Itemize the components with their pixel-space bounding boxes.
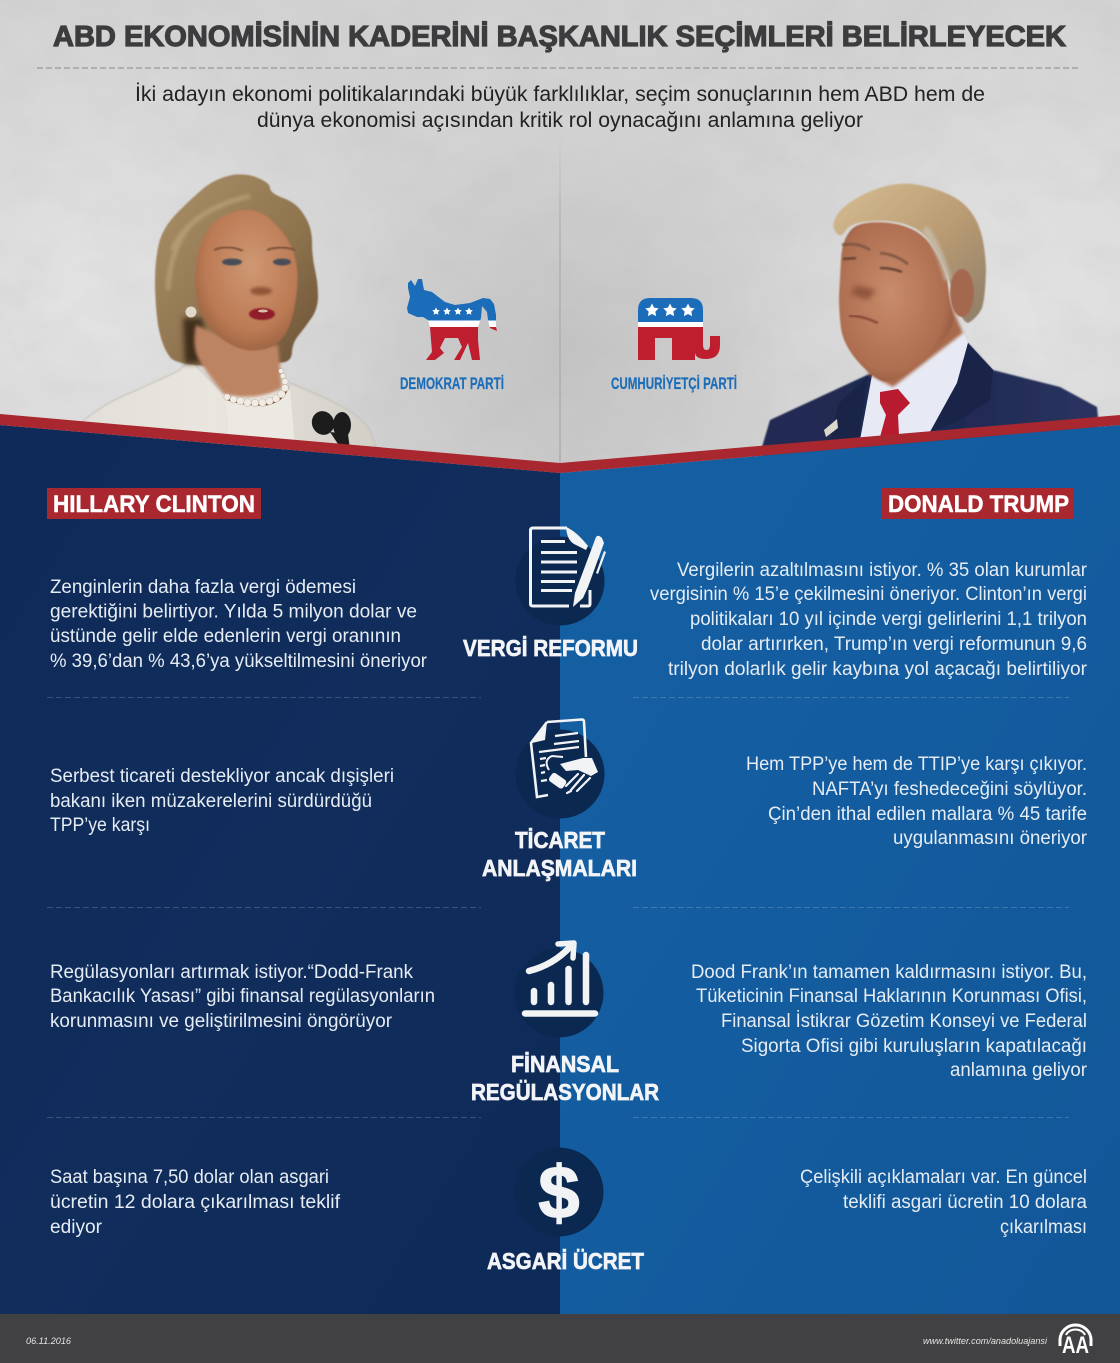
label: Vergi Reformu: VERGİ REFORMU	[463, 635, 638, 661]
text: Trump tax reform: politikaları 10 yıl içinde vergi gelirlerini 1,1 trilyon	[690, 609, 1087, 630]
text: Clinton tax reform	[50, 577, 428, 672]
red chevron band	[0, 414, 1120, 473]
text: Trump minimum wage: Çelişkili açıklamaları var. En güncel	[800, 1167, 1087, 1188]
text: Clinton financial regulation	[50, 962, 435, 1032]
text: Clinton trade agreements	[50, 766, 394, 836]
icon: trade agreement handshake	[516, 720, 604, 818]
footer url: www.twitter.com/anadoluajansi	[923, 1336, 1048, 1346]
icon: minimum wage dollar	[514, 1148, 604, 1236]
text: Trump minimum wage	[800, 1167, 1087, 1238]
text: Trump trade agreements: Çin’den ithal edilen mallara % 45 tarife	[768, 804, 1087, 825]
text: Trump trade agreements: uygulanmasını öneriyor	[893, 828, 1088, 849]
label: Finansal Regülasyonlar: FİNANSAL	[511, 1051, 619, 1077]
label: Finansal Regülasyonlar	[471, 1051, 659, 1105]
text: Trump tax reform: Vergilerin azaltılmasını istiyor. % 35 olan kurumlar	[677, 560, 1088, 581]
text: Trump trade agreements: NAFTA’yı feshedeceğini söylüyor.	[812, 779, 1087, 800]
subtitle: İki adayın ekonomi politikalarındaki büyük farklılıklar, seçim sonuçlarının hem ABD hem de	[135, 83, 985, 106]
text: Clinton minimum wage: ücretin 12 dolara çıkarılması teklif	[50, 1192, 341, 1213]
text: Clinton financial regulation: Regülasyonları artırmak istiyor.“Dodd-Frank	[50, 962, 413, 983]
subtitle: dünya ekonomisi açısından kritik rol oynacağını anlamına geliyor	[257, 109, 863, 132]
text: Clinton financial regulation: Bankacılık Yasası” gibi finansal regülasyonların	[50, 986, 435, 1007]
text: Trump tax reform: vergisinin % 15’e çekilmesini öneriyor. Clinton’ın vergi	[650, 584, 1087, 605]
text: Clinton minimum wage: ediyor	[50, 1217, 103, 1238]
title: ABD EKONOMİSİNİN KADERİNİ BAŞKANLIK SEÇİMLERİ BELİRLEYECEK	[53, 21, 1066, 53]
footer date: 06.11.2016	[26, 1336, 71, 1346]
name tag: Hillary Clinton: HILLARY CLINTON	[53, 491, 255, 518]
icon: financial regulation chart	[514, 943, 604, 1038]
footer bar	[0, 1314, 1120, 1363]
text: Trump minimum wage: çıkarılması	[1000, 1217, 1087, 1238]
text: Clinton trade agreements: bakanı iken müzakerelerini sürdürdüğü	[50, 791, 372, 812]
text: Trump minimum wage: teklifi asgari ücretin 10 dolara	[843, 1192, 1087, 1213]
text: Trump financial regulation: Sigorta Ofisi gibi kuruluşların kapatılacağı	[741, 1036, 1087, 1057]
text: Trump financial regulation	[691, 962, 1088, 1081]
portrait: Hillary Clinton	[83, 174, 377, 450]
text: Trump trade agreements: Hem TPP’ye hem de TTIP’ye karşı çıkıyor.	[746, 754, 1087, 775]
text: Trump financial regulation: Finansal İstikrar Gözetim Konseyi ve Federal	[721, 1011, 1087, 1032]
label: Demokrat Parti: DEMOKRAT PARTİ	[400, 375, 504, 393]
label: Ticaret Anlaşmaları	[482, 827, 637, 881]
text: Clinton tax reform: gerektiğini belirtiyor. Yılda 5 milyon dolar ve	[50, 602, 417, 622]
logo: Republican Party elephant	[638, 298, 720, 360]
name tag: Donald Trump: DONALD TRUMP	[888, 491, 1069, 518]
text: Trump trade agreements	[746, 754, 1088, 849]
text: Trump tax reform: trilyon dolarlık gelir kaybına yol açacağı belirtiliyor	[668, 659, 1088, 680]
logo: Anadolu Agency	[1060, 1325, 1091, 1359]
icon: minimum wage dollar: $	[538, 1151, 580, 1234]
icon: tax reform document and pen	[516, 527, 606, 626]
text: Clinton tax reform: % 39,6’dan % 43,6’ya yükseltilmesini öneriyor	[50, 651, 428, 672]
label: Cumhuriyetçi Parti: CUMHURİYETÇİ PARTİ	[611, 375, 737, 393]
label: Finansal Regülasyonlar: REGÜLASYONLAR	[471, 1079, 659, 1105]
panel: Trump side	[560, 425, 1120, 1315]
text: Clinton tax reform: Zenginlerin daha fazla vergi ödemesi	[50, 577, 356, 598]
text: Clinton minimum wage: Saat başına 7,50 dolar olan asgari	[50, 1167, 329, 1188]
text: Clinton financial regulation: korunmasını ve geliştirilmesini öngörüyor	[50, 1011, 393, 1032]
label: Asgari Ücret: ASGARİ ÜCRET	[487, 1248, 644, 1274]
text: Trump financial regulation: anlamına geliyor	[950, 1060, 1088, 1081]
logo: Democratic Party donkey	[407, 279, 497, 360]
text: Trump financial regulation: Dood Frank’ın tamamen kaldırmasını istiyor. Bu,	[691, 962, 1087, 983]
text: Trump tax reform	[650, 560, 1088, 680]
text: Clinton trade agreements: TPP’ye karşı	[50, 815, 150, 836]
background: grey concrete texture	[0, 0, 1120, 480]
text: Clinton tax reform: üstünde gelir elde edenlerin vergi oranının	[50, 626, 401, 647]
panel: Clinton side	[0, 425, 560, 1315]
logo: Anadolu Agency: AA	[1062, 1332, 1089, 1359]
text: Clinton minimum wage	[50, 1167, 341, 1238]
label: Ticaret Anlaşmaları: TİCARET	[515, 827, 605, 853]
text: Trump tax reform: dolar artırırken, Trump’ın vergi reformunun 9,6	[701, 634, 1087, 655]
text: Clinton trade agreements: Serbest ticareti destekliyor ancak dışişleri	[50, 766, 394, 787]
portrait: Donald Trump	[762, 184, 1098, 472]
subtitle	[135, 83, 985, 132]
text: Trump financial regulation: Tüketicinin Finansal Haklarının Korunması Ofisi,	[696, 986, 1087, 1007]
label: Ticaret Anlaşmaları: ANLAŞMALARI	[482, 855, 637, 881]
